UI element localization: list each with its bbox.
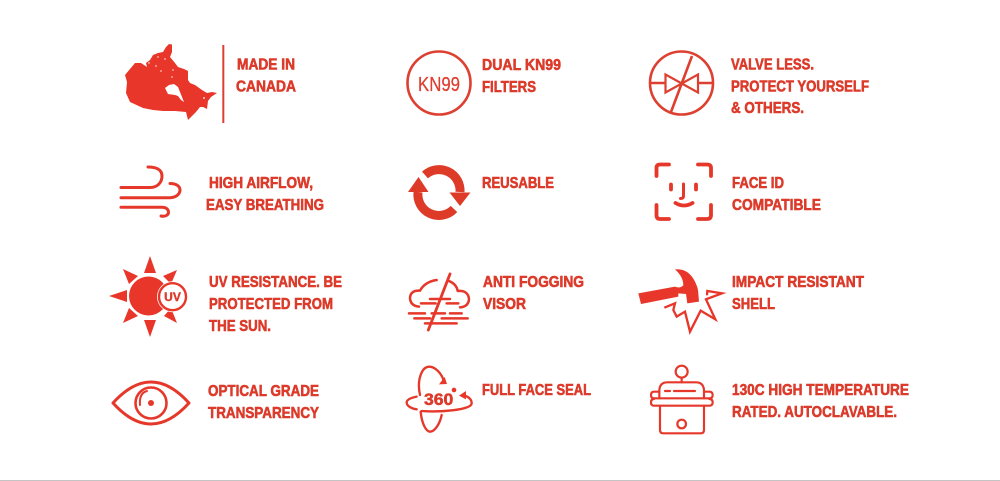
icon: UV sun — [109, 256, 188, 337]
text: optical grade transparency — [208, 383, 320, 422]
text: made in Canada: MADE IN — [237, 56, 295, 74]
text: valve less: & OTHERS. — [731, 100, 804, 117]
text: optical grade transparency: TRANSPARENCY — [208, 405, 320, 422]
text: valve less: VALVE LESS. — [731, 56, 814, 74]
text: high airflow: HIGH AIRFLOW, — [209, 175, 313, 192]
icon: map of Canada — [125, 44, 217, 120]
text: UV resistance — [209, 274, 342, 335]
icon: KN99 circle: KN99 — [418, 74, 460, 96]
text: UV resistance: UV RESISTANCE. BE — [209, 274, 342, 291]
icon: UV sun: UV — [164, 290, 181, 304]
text: high airflow — [206, 175, 324, 214]
text: dual KN99 filters: DUAL KN99 — [482, 57, 561, 74]
icon: crossed-out valve — [650, 52, 713, 114]
icon: eye — [113, 382, 189, 424]
text: dual KN99 filters: FILTERS — [482, 79, 536, 96]
divider: Canada rule — [222, 45, 224, 123]
text: face ID compatible: FACE ID — [732, 175, 784, 192]
text: high temperature autoclavable: RATED. AUTOCLAVABLE. — [732, 404, 897, 421]
icon: face ID — [656, 164, 711, 219]
icon: anti fog cloud — [409, 274, 469, 330]
icon: 360 rotation — [407, 367, 472, 432]
text: made in Canada: CANADA — [236, 78, 296, 96]
text: reusable: REUSABLE — [482, 175, 554, 192]
text: impact resistant shell: IMPACT RESISTANT — [732, 274, 864, 291]
text: impact resistant shell: SHELL — [732, 296, 775, 313]
icon: KN99 circle — [408, 52, 470, 114]
text: optical grade transparency: OPTICAL GRADE — [208, 383, 319, 400]
icon: reusable arrows — [408, 170, 470, 215]
text: impact resistant shell — [732, 274, 864, 313]
text: high airflow: EASY BREATHING — [206, 197, 324, 214]
text: UV resistance: THE SUN. — [209, 318, 271, 335]
text: made in Canada — [236, 56, 296, 96]
text: high temperature autoclavable — [732, 382, 909, 421]
text: anti fogging visor: VISOR — [483, 296, 526, 313]
icon: 360 rotation: 360 — [424, 390, 453, 409]
text: face ID compatible — [732, 175, 821, 214]
icon: hammer and impact burst — [638, 269, 722, 332]
text: high temperature autoclavable: 130C HIGH TEMPERATURE — [732, 382, 909, 399]
text: anti fogging visor — [483, 274, 584, 313]
text: UV resistance: PROTECTED FROM — [209, 296, 333, 313]
text: valve less — [731, 56, 869, 117]
text: anti fogging visor: ANTI FOGGING — [483, 274, 584, 291]
text: face ID compatible: COMPATIBLE — [732, 197, 821, 214]
text: valve less: PROTECT YOURSELF — [731, 78, 869, 96]
text: dual KN99 filters — [482, 57, 561, 96]
icon: autoclave pot — [651, 366, 713, 433]
text: full face seal: FULL FACE SEAL — [482, 382, 591, 399]
icon: wind — [121, 167, 180, 216]
